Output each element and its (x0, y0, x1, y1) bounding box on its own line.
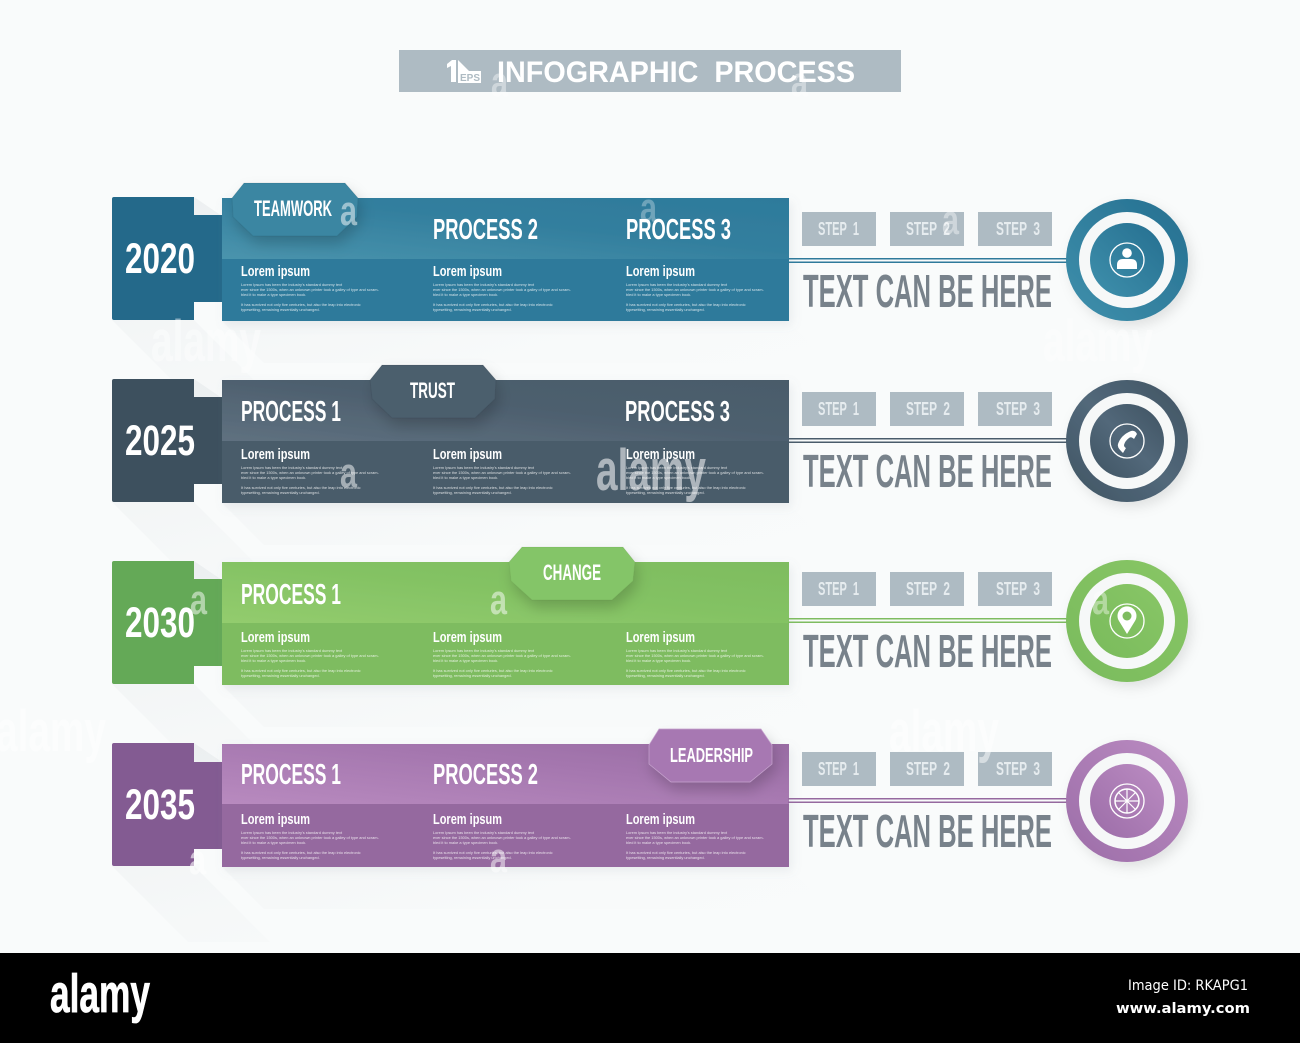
caption 2035: TEXT CAN BE HERE (803, 805, 1052, 857)
watermarks: a (791, 58, 808, 105)
year block 2030: 2030 (125, 599, 195, 647)
badge: trust (370, 365, 496, 418)
column 1 text 2030: Lorem Ipsum has been the industry's standard dummy text (241, 648, 343, 653)
step chips 2025 (802, 392, 1052, 426)
row 2025 (112, 365, 1188, 578)
column 1 text 2025: ever since the 1500s, when an unknown printer took a galley of type and scram- (241, 470, 379, 475)
connector line 2030 (788, 618, 1070, 623)
year block 2030 (112, 561, 222, 684)
column 2 text 2020: bled it to make a type specimen book. (433, 292, 498, 297)
connector line 2025 (788, 438, 1070, 443)
step chips 2025: STEP 2 (906, 399, 950, 419)
column 3 text 2035: Lorem ipsum (626, 811, 695, 828)
circle icon: wheel (1066, 740, 1188, 862)
column 2 text 2020: typesetting, remaining essentially unchanged. (433, 307, 512, 312)
long shadows 2020 (112, 197, 830, 396)
badge: change (509, 547, 635, 600)
column 1 text 2020 (241, 263, 379, 312)
column 1 text 2025: bled it to make a type specimen book. (241, 475, 306, 480)
process headings 2020: PROCESS 3 (626, 214, 731, 246)
process headings 2035: PROCESS 1 (241, 759, 341, 791)
column 2 text 2030 (433, 629, 571, 678)
column 1 text 2030: Lorem ipsum (241, 629, 310, 646)
column 2 text 2020: Lorem Ipsum has been the industry's standard dummy text (433, 282, 535, 287)
column 3 text 2030: typesetting, remaining essentially unchanged. (626, 673, 705, 678)
connector line 2020 (788, 258, 1070, 263)
column 2 text 2035: typesetting, remaining essentially unchanged. (433, 855, 512, 860)
column 1 text 2035: It has survived not only five centuries, but also the leap into electronic (241, 850, 361, 855)
watermarks: a (490, 576, 507, 623)
column 1 text 2025: It has survived not only five centuries, but also the leap into electronic (241, 485, 361, 490)
column 1 text 2025 (241, 446, 379, 495)
watermarks: alamy (0, 699, 106, 764)
column 1 text 2030: typesetting, remaining essentially unchanged. (241, 673, 320, 678)
column 1 text 2025: Lorem ipsum (241, 446, 310, 463)
column 2 text 2030: bled it to make a type specimen book. (433, 658, 498, 663)
column 2 text 2030: It has survived not only five centuries, but also the leap into electronic (433, 668, 553, 673)
step chips 2025: STEP 3 (996, 399, 1040, 419)
process headings 2025: PROCESS 1 (241, 396, 341, 428)
column 3 text 2025: typesetting, remaining essentially unchanged. (626, 490, 705, 495)
column 1 text 2020: Lorem Ipsum has been the industry's standard dummy text (241, 282, 343, 287)
circle icon: person (1066, 199, 1188, 321)
step chips 2035: STEP 2 (906, 759, 950, 779)
column 1 text 2035: Lorem Ipsum has been the industry's standard dummy text (241, 830, 343, 835)
column 3 text 2025: bled it to make a type specimen book. (626, 475, 691, 480)
connector line 2035 (788, 798, 1070, 803)
badge: teamwork: TEAMWORK (254, 196, 332, 221)
watermarks: a (340, 187, 357, 234)
title banner (399, 50, 901, 92)
circle icon: phone (1066, 380, 1188, 502)
process headings 2025: PROCESS 3 (625, 396, 730, 428)
long shadows 2035 (112, 743, 830, 942)
column 3 text 2030: Lorem Ipsum has been the industry's standard dummy text (626, 648, 728, 653)
column 3 text 2020: ever since the 1500s, when an unknown printer took a galley of type and scram- (626, 287, 764, 292)
watermarks: a (942, 196, 959, 243)
column 2 text 2025: bled it to make a type specimen book. (433, 475, 498, 480)
image id: Image ID: RKAPG1 (1128, 978, 1248, 994)
column 2 text 2035: bled it to make a type specimen book. (433, 840, 498, 845)
column 3 text 2030: It has survived not only five centuries, but also the leap into electronic (626, 668, 746, 673)
step chips 2035: STEP 1 (818, 759, 859, 779)
column 1 text 2030: ever since the 1500s, when an unknown printer took a galley of type and scram- (241, 653, 379, 658)
column 1 text 2025: Lorem Ipsum has been the industry's standard dummy text (241, 465, 343, 470)
process headings 2020: PROCESS 2 (433, 214, 538, 246)
column 1 text 2020: bled it to make a type specimen book. (241, 292, 306, 297)
column 2 text 2025: It has survived not only five centuries, but also the leap into electronic (433, 485, 553, 490)
watermarks: a (640, 184, 657, 231)
process headings 2020 (433, 214, 731, 246)
column 3 text 2030: Lorem ipsum (626, 629, 695, 646)
column 2 text 2035 (433, 811, 571, 860)
footer bar (0, 953, 1300, 1043)
column 2 text 2020: Lorem ipsum (433, 263, 502, 280)
step chips 2030: STEP 2 (906, 579, 950, 599)
column 2 text 2030: typesetting, remaining essentially unchanged. (433, 673, 512, 678)
process headings 2035 (241, 759, 538, 791)
long shadows 2030 (112, 561, 830, 760)
website: www.alamy.com (1116, 1001, 1250, 1017)
column 3 text 2035: Lorem Ipsum has been the industry's standard dummy text (626, 830, 728, 835)
step chips 2030 (802, 572, 1052, 606)
column 3 text 2020 (626, 263, 764, 312)
badge: leadership: LEADERSHIP (670, 745, 753, 767)
watermarks (0, 58, 1153, 883)
row 2020 (112, 183, 1188, 396)
process bar 2030 (222, 562, 789, 685)
watermarks: alamy (151, 309, 261, 374)
column 2 text 2030: Lorem ipsum (433, 629, 502, 646)
step chips 2030: STEP 3 (996, 579, 1040, 599)
column 2 text 2020: It has survived not only five centuries, but also the leap into electronic (433, 302, 553, 307)
column 3 text 2020: Lorem Ipsum has been the industry's standard dummy text (626, 282, 728, 287)
column 3 text 2020: bled it to make a type specimen book. (626, 292, 691, 297)
column 2 text 2030: Lorem Ipsum has been the industry's standard dummy text (433, 648, 535, 653)
year block 2020 (112, 197, 222, 320)
column 1 text 2030: It has survived not only five centuries, but also the leap into electronic (241, 668, 361, 673)
step chips 2025: STEP 1 (818, 399, 859, 419)
step chips 2020: STEP 1 (818, 219, 859, 239)
column 1 text 2030 (241, 629, 379, 678)
year block 2025: 2025 (125, 417, 195, 465)
step chips 2020: STEP 2 (906, 219, 950, 239)
circle icon: location pin (1066, 560, 1188, 682)
column 3 text 2025: Lorem ipsum (626, 446, 695, 463)
column 3 text 2030: bled it to make a type specimen book. (626, 658, 691, 663)
column 2 text 2030: ever since the 1500s, when an unknown printer took a galley of type and scram- (433, 653, 571, 658)
column 3 text 2020: It has survived not only five centuries, but also the leap into electronic (626, 302, 746, 307)
column 1 text 2035: ever since the 1500s, when an unknown printer took a galley of type and scram- (241, 835, 379, 840)
step chips 2020: STEP 3 (996, 219, 1040, 239)
column 1 text 2020: It has survived not only five centuries, but also the leap into electronic (241, 302, 361, 307)
column 3 text 2035: It has survived not only five centuries, but also the leap into electronic (626, 850, 746, 855)
column 1 text 2035: typesetting, remaining essentially unchanged. (241, 855, 320, 860)
step chips 2020 (802, 212, 1052, 246)
watermarks: a (1092, 576, 1109, 623)
column 3 text 2035: bled it to make a type specimen book. (626, 840, 691, 845)
title banner: EPS (460, 73, 480, 84)
column 3 text 2025: Lorem Ipsum has been the industry's standard dummy text (626, 465, 728, 470)
watermarks: alamy (889, 699, 999, 764)
row 2035 (112, 729, 1188, 942)
column 2 text 2035: Lorem ipsum (433, 811, 502, 828)
column 2 text 2020: ever since the 1500s, when an unknown printer took a galley of type and scram- (433, 287, 571, 292)
step chips 2030: STEP 1 (818, 579, 859, 599)
column 2 text 2035: It has survived not only five centuries, but also the leap into electronic (433, 850, 553, 855)
column 3 text 2035 (626, 811, 764, 860)
step chips 2035 (802, 752, 1052, 786)
column 1 text 2020: typesetting, remaining essentially unchanged. (241, 307, 320, 312)
watermarks: a (490, 834, 507, 881)
column 3 text 2035: typesetting, remaining essentially unchanged. (626, 855, 705, 860)
column 1 text 2035: bled it to make a type specimen book. (241, 840, 306, 845)
badge: trust: TRUST (410, 378, 455, 403)
watermarks: alamy (596, 438, 706, 503)
caption 2025: TEXT CAN BE HERE (803, 445, 1052, 497)
column 2 text 2025: Lorem Ipsum has been the industry's standard dummy text (433, 465, 535, 470)
column 3 text 2025: ever since the 1500s, when an unknown printer took a galley of type and scram- (626, 470, 764, 475)
title banner: INFOGRAPHIC PROCESS (497, 56, 855, 89)
column 3 text 2035: ever since the 1500s, when an unknown printer took a galley of type and scram- (626, 835, 764, 840)
watermarks: a (190, 576, 207, 623)
badge: change: CHANGE (543, 560, 601, 585)
column 1 text 2035: Lorem ipsum (241, 811, 310, 828)
year block 2020: 2020 (125, 235, 195, 283)
process headings 2035: PROCESS 2 (433, 759, 538, 791)
year block 2025 (112, 379, 222, 502)
year block 2035 (112, 743, 222, 866)
column 1 text 2020: Lorem ipsum (241, 263, 310, 280)
watermarks: a (340, 449, 357, 496)
column 2 text 2035: ever since the 1500s, when an unknown printer took a galley of type and scram- (433, 835, 571, 840)
column 3 text 2030: ever since the 1500s, when an unknown printer took a galley of type and scram- (626, 653, 764, 658)
column 1 text 2030: bled it to make a type specimen book. (241, 658, 306, 663)
caption 2020: TEXT CAN BE HERE (803, 265, 1052, 317)
process headings 2025 (241, 396, 730, 428)
watermarks: a (491, 58, 508, 105)
caption 2030: TEXT CAN BE HERE (803, 625, 1052, 677)
column 1 text 2035 (241, 811, 379, 860)
column 3 text 2020: typesetting, remaining essentially unchanged. (626, 307, 705, 312)
column 2 text 2035: Lorem Ipsum has been the industry's standard dummy text (433, 830, 535, 835)
column 1 text 2020: ever since the 1500s, when an unknown printer took a galley of type and scram- (241, 287, 379, 292)
watermarks: alamy (1043, 309, 1153, 374)
process bar 2035 (222, 744, 789, 867)
column 1 text 2025: typesetting, remaining essentially unchanged. (241, 490, 320, 495)
column 2 text 2025: Lorem ipsum (433, 446, 502, 463)
process bar 2025 (222, 380, 789, 503)
watermarks: a (189, 836, 206, 883)
column 3 text 2025 (626, 446, 764, 495)
badge: leadership (649, 729, 772, 782)
process bar 2020 (222, 198, 789, 321)
column 2 text 2025: ever since the 1500s, when an unknown printer took a galley of type and scram- (433, 470, 571, 475)
row 2030 (112, 547, 1188, 760)
footer logo: alamy (50, 964, 150, 1024)
column 3 text 2030 (626, 629, 764, 678)
column 2 text 2025: typesetting, remaining essentially unchanged. (433, 490, 512, 495)
column 3 text 2020: Lorem ipsum (626, 263, 695, 280)
column 3 text 2025: It has survived not only five centuries, but also the leap into electronic (626, 485, 746, 490)
column 2 text 2020 (433, 263, 571, 312)
column 2 text 2025 (433, 446, 571, 495)
process heading 2030: PROCESS 1 (241, 579, 341, 611)
long shadows 2025 (112, 379, 830, 578)
step chips 2035: STEP 3 (996, 759, 1040, 779)
year block 2035: 2035 (125, 781, 195, 829)
badge: teamwork (232, 183, 358, 236)
